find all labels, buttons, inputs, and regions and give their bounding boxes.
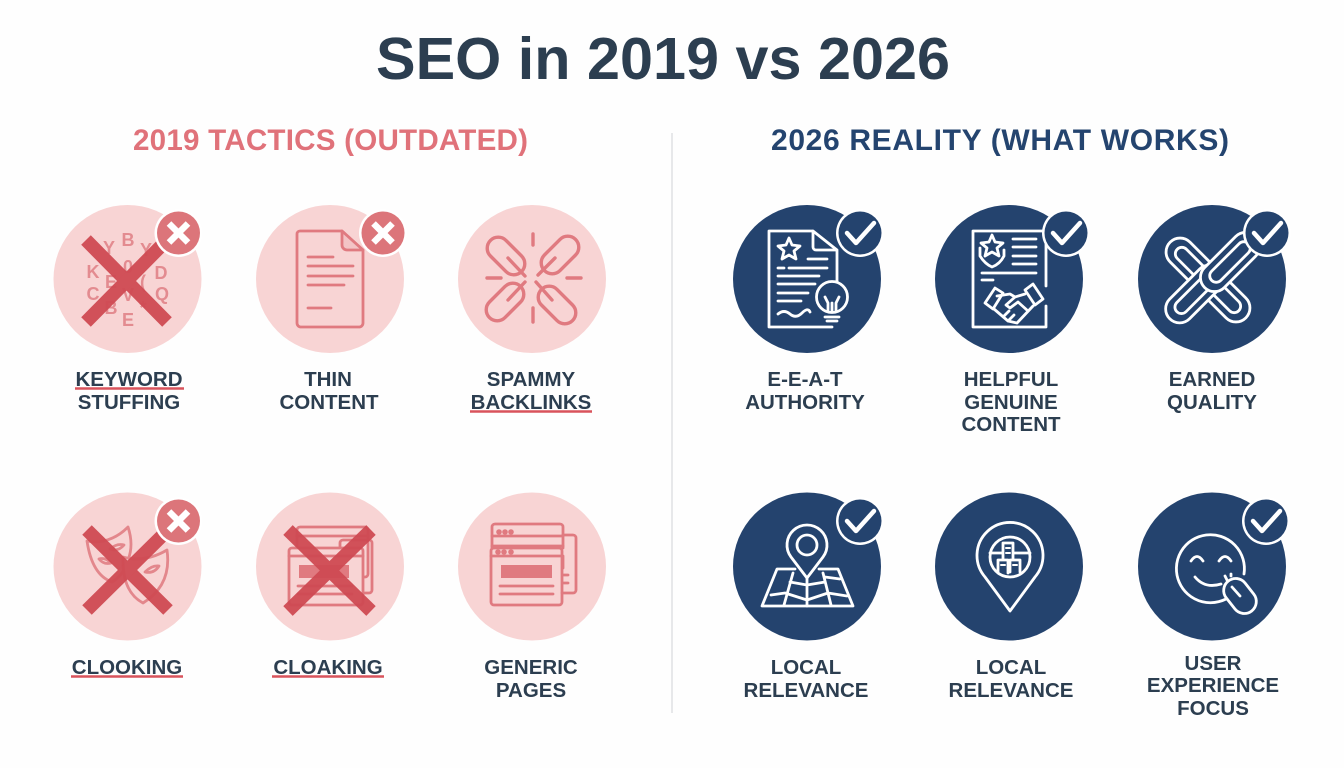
icon: scattered keyword letters: V — [122, 285, 134, 305]
badge: check — [1242, 497, 1290, 545]
label: e-e-a-t authority: AUTHORITY — [745, 391, 865, 414]
label: local relevance — [744, 656, 868, 702]
label: local relevance: RELEVANCE — [949, 679, 1073, 702]
label: user experience focus: FOCUS — [1177, 697, 1249, 720]
icon: red cross — [86, 240, 167, 322]
label: thin content: THIN — [304, 368, 352, 391]
badge: x — [359, 209, 407, 257]
icon: scattered keyword letters: Y — [103, 238, 115, 258]
label: user experience focus — [1147, 652, 1279, 720]
icon: scattered keyword letters: B — [104, 298, 118, 318]
icon: map with pin — [762, 525, 853, 606]
badge: check — [1042, 209, 1090, 257]
item: earned quality — [1138, 205, 1291, 414]
icon: theatre masks — [87, 527, 168, 603]
icon: red cross — [288, 530, 371, 611]
item: keyword stuffing — [54, 205, 202, 414]
icon: scattered keyword letters: E — [105, 272, 117, 292]
icon: scattered keyword letters: 0 — [123, 257, 133, 277]
label: keyword stuffing — [75, 368, 184, 414]
icon: scattered keyword letters: * — [139, 298, 147, 318]
item: local relevance pin — [935, 492, 1083, 702]
badge: check — [836, 209, 884, 257]
item: spammy backlinks — [458, 205, 606, 414]
label: spammy backlinks: SPAMMY — [487, 368, 576, 391]
label: helpful genuine content — [961, 368, 1061, 436]
label: generic pages: PAGES — [496, 679, 566, 702]
badge: check — [1243, 209, 1291, 257]
item: thin content — [256, 205, 407, 414]
label: helpful genuine content: CONTENT — [961, 413, 1061, 436]
label: local relevance: LOCAL — [976, 656, 1046, 679]
badge: x — [154, 497, 202, 545]
icon: browser windows — [289, 527, 372, 605]
icon: scattered keyword letters: K — [86, 262, 100, 282]
icon: scattered keyword letters: C — [86, 284, 100, 304]
label: e-e-a-t authority: E-E-A-T — [767, 368, 843, 391]
icon: smiley with mouse — [1176, 535, 1261, 618]
label: spammy backlinks — [470, 368, 592, 414]
icon: document — [297, 231, 363, 327]
icon: scattered keyword letters: E — [122, 310, 134, 330]
item: helpful genuine content — [935, 205, 1090, 436]
icon: pin with buildings — [977, 522, 1043, 611]
label: thin content: CONTENT — [279, 391, 379, 414]
icon: scattered keyword letters: Q — [155, 284, 169, 304]
label: helpful genuine content: GENUINE — [964, 391, 1058, 414]
label: earned quality: QUALITY — [1167, 391, 1257, 414]
badge: check — [836, 497, 884, 545]
label: earned quality: EARNED — [1169, 368, 1255, 391]
label: generic pages — [484, 656, 578, 702]
item: cloaking — [256, 492, 404, 679]
label: spammy backlinks: BACKLINKS — [471, 391, 591, 414]
item: clooking — [54, 492, 202, 679]
item: e-e-a-t authority — [733, 205, 884, 414]
icon: scattered keyword letters — [86, 230, 169, 330]
icon: broken chain — [482, 232, 583, 328]
label: user experience focus: EXPERIENCE — [1147, 674, 1279, 697]
label: local relevance — [949, 656, 1073, 702]
icon: document with shield and handshake — [973, 231, 1046, 327]
icon: stacked web pages — [491, 524, 576, 605]
heading: 2026 reality: 2026 REALITY (WHAT WORKS) — [771, 124, 1229, 157]
icon: interlinked chain — [1160, 227, 1265, 329]
label: helpful genuine content: HELPFUL — [964, 368, 1058, 391]
icon: document with star and bulb — [769, 231, 848, 327]
icon: scattered keyword letters: B — [122, 230, 134, 250]
label: clooking: CLOOKING — [72, 656, 182, 679]
label: generic pages: GENERIC — [484, 656, 578, 679]
label: keyword stuffing: STUFFING — [78, 391, 180, 414]
label: earned quality — [1167, 368, 1257, 414]
item: generic pages — [458, 492, 606, 702]
label: local relevance: LOCAL — [771, 656, 841, 679]
label: e-e-a-t authority — [745, 368, 865, 414]
label: thin content — [279, 368, 379, 414]
label: cloaking: CLOAKING — [273, 656, 383, 679]
label: user experience focus: USER — [1185, 652, 1242, 675]
badge: x — [154, 209, 202, 257]
item: user experience focus — [1138, 492, 1290, 720]
heading: 2019 tactics: 2019 TACTICS (OUTDATED) — [133, 124, 528, 157]
panel: 2026 reality — [733, 124, 1291, 720]
label: local relevance: RELEVANCE — [744, 679, 868, 702]
icon: scattered keyword letters: ( — [140, 272, 146, 292]
icon: red cross — [87, 530, 168, 610]
label: keyword stuffing: KEYWORD — [75, 368, 183, 391]
icon: scattered keyword letters: Y — [140, 240, 152, 260]
item: local relevance map — [733, 492, 884, 702]
panel: 2019 tactics — [54, 124, 606, 702]
title: SEO in 2019 vs 2026 — [376, 25, 950, 92]
icon: scattered keyword letters: D — [154, 263, 168, 283]
